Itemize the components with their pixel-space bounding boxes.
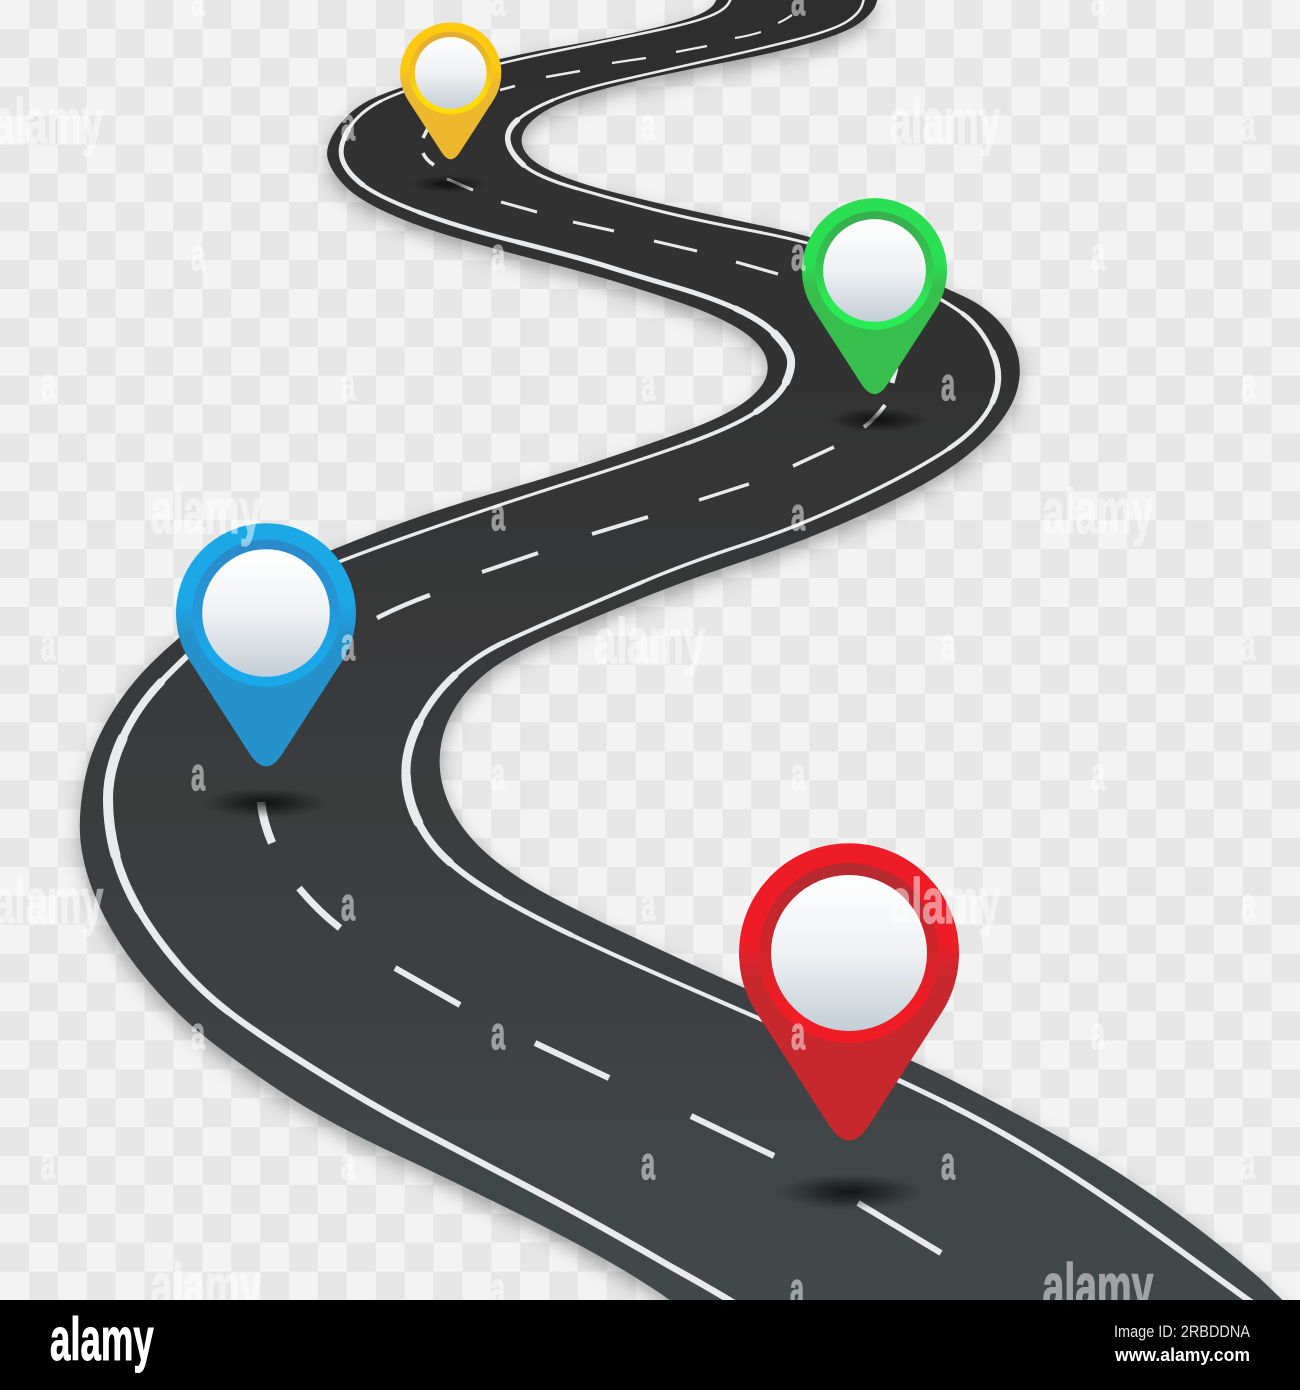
small watermark letters: a bbox=[1091, 748, 1105, 800]
small watermark letters: a bbox=[41, 358, 55, 410]
map pin: green bbox=[802, 198, 947, 432]
pin shadow bbox=[828, 408, 928, 432]
image id: Image ID: 2RBDDNA bbox=[1114, 1322, 1251, 1341]
small watermark letters: a bbox=[341, 618, 355, 670]
pin marker bbox=[739, 843, 959, 1140]
large watermark words: alamy bbox=[890, 88, 1000, 157]
small watermark letters: a bbox=[1241, 98, 1255, 150]
pin shadow bbox=[411, 175, 487, 193]
small watermark letters: a bbox=[1091, 228, 1105, 280]
large watermark words: alamy bbox=[890, 868, 1000, 937]
pin marker bbox=[176, 523, 356, 766]
small watermark letters: a bbox=[1241, 358, 1255, 410]
small watermark letters: a bbox=[491, 748, 505, 800]
map pin: yellow bbox=[400, 23, 501, 193]
small watermark letters: a bbox=[1241, 878, 1255, 930]
small watermark letters: a bbox=[341, 878, 355, 930]
large watermark words: alamy bbox=[1043, 478, 1153, 547]
large watermark words: alamy bbox=[151, 478, 261, 547]
small watermark letters: a bbox=[341, 1137, 355, 1189]
small watermark letters: a bbox=[491, 1263, 505, 1315]
small watermark letters: a bbox=[1241, 1137, 1255, 1189]
small watermark letters: a bbox=[191, 1007, 205, 1059]
large watermark words: alamy bbox=[151, 1253, 261, 1322]
small watermark letters: a bbox=[1241, 618, 1255, 670]
small watermark letters: a bbox=[41, 1137, 55, 1189]
small watermark letters: a bbox=[341, 98, 355, 150]
pin shadow bbox=[778, 1174, 922, 1210]
map pin: red bbox=[739, 843, 959, 1210]
small watermark letters: a bbox=[941, 358, 955, 410]
small watermark letters: a bbox=[641, 1137, 655, 1189]
small watermark letters: a bbox=[491, 1007, 505, 1059]
small watermark letters: a bbox=[941, 618, 955, 670]
small watermark letters: a bbox=[491, 488, 505, 540]
large watermark words: alamy bbox=[1043, 1253, 1153, 1322]
pin shadow bbox=[201, 788, 329, 818]
small watermark letters: a bbox=[191, 748, 205, 800]
website: www.alamy.com bbox=[1114, 1345, 1250, 1365]
large watermark words bbox=[0, 88, 1153, 1322]
small watermark letters: a bbox=[941, 1137, 955, 1189]
small watermark letters: a bbox=[791, 1007, 805, 1059]
pin marker bbox=[400, 23, 501, 159]
footer logo: alamy bbox=[50, 1306, 154, 1373]
pin marker bbox=[802, 198, 947, 394]
small watermark letters: a bbox=[791, 228, 805, 280]
small watermark letters: a bbox=[791, 488, 805, 540]
small watermark letters: a bbox=[41, 618, 55, 670]
small watermark letters: a bbox=[491, 228, 505, 280]
map pin: blue bbox=[176, 523, 356, 818]
small watermark letters: a bbox=[1091, 1007, 1105, 1059]
centre lane dashes bbox=[261, 15, 941, 1253]
small watermark letters: a bbox=[791, 748, 805, 800]
small watermark letters: a bbox=[790, 1263, 804, 1315]
small watermark letters: a bbox=[341, 358, 355, 410]
large watermark words: alamy bbox=[595, 608, 705, 677]
small watermark letters: a bbox=[641, 358, 655, 410]
small watermark letters: a bbox=[641, 98, 655, 150]
small watermark letters: a bbox=[641, 878, 655, 930]
small watermark letters: a bbox=[191, 228, 205, 280]
footer bar bbox=[0, 1300, 1300, 1390]
edge line: left side of road bbox=[108, 0, 791, 1320]
edge line: right side of road bbox=[406, 0, 1265, 1312]
